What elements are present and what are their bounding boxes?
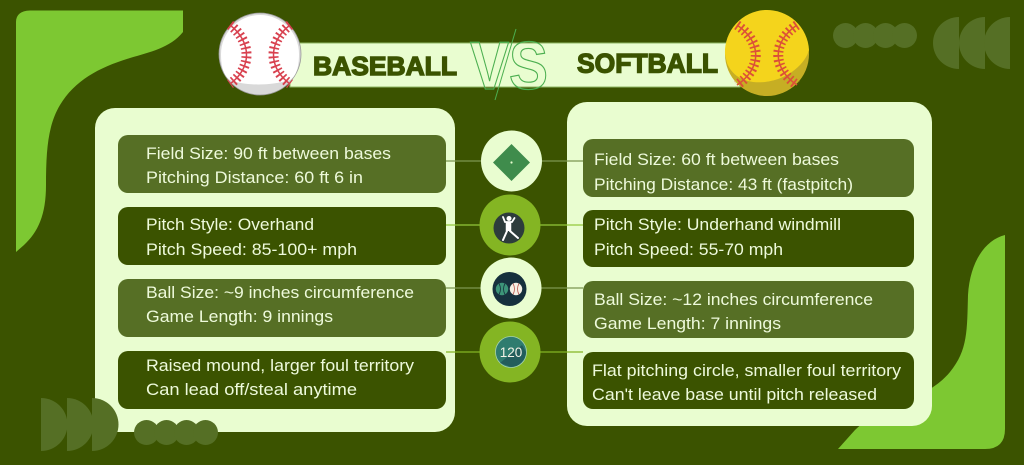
row: field size, baseball: Pitching Distance: 60 ft 6 in	[146, 168, 363, 187]
decorative dots: top right	[833, 23, 917, 48]
connector: pitch	[446, 224, 583, 226]
decorative half circles: top right	[933, 17, 1010, 69]
row: ball size, softball: Game Length: 7 innings	[594, 314, 781, 333]
row: ball size, softball: Ball Size: ~12 inches circumference	[594, 290, 873, 309]
row: pitch, baseball	[118, 207, 446, 265]
connector: rules	[446, 351, 583, 353]
icon: baseball	[219, 13, 301, 95]
row: pitch, baseball: Pitch Style: Overhand	[146, 215, 314, 234]
panel: baseball	[95, 108, 455, 432]
row: field size, softball: Pitching Distance: 43 ft (fastpitch)	[594, 175, 853, 194]
row: rules, baseball: Can lead off/steal anytime	[146, 380, 357, 399]
decorative dots: bottom left	[134, 420, 218, 445]
row: pitch, softball: Pitch Speed: 55-70 mph	[594, 240, 783, 259]
row: ball size, baseball: Ball Size: ~9 inches circumference	[146, 283, 414, 302]
row: ball size, baseball	[118, 279, 446, 337]
title banner	[290, 43, 740, 87]
decorative half circles: bottom left	[41, 398, 119, 451]
VS mark: VS	[470, 28, 548, 104]
icon: field diamond	[481, 130, 542, 192]
row: pitch, softball: Pitch Style: Underhand windmill	[594, 215, 841, 234]
row: pitch, baseball: Pitch Speed: 85-100+ mph	[146, 240, 357, 259]
decorative corner shape: bottom right	[838, 235, 1005, 449]
row: field size, baseball: Field Size: 90 ft between bases	[146, 144, 391, 163]
row: field size, softball	[583, 139, 914, 197]
row: pitch, softball	[583, 210, 914, 267]
connector: ball size	[446, 287, 583, 289]
row: rules, softball	[583, 352, 914, 409]
row: ball size, baseball: Game Length: 9 innings	[146, 307, 333, 326]
icon: speed 120: 120	[500, 345, 522, 360]
row: field size, softball: Field Size: 60 ft between bases	[594, 150, 839, 169]
panel: softball	[567, 102, 932, 426]
row: field size, baseball	[118, 135, 446, 193]
icon: two balls	[480, 258, 542, 318]
row: ball size, softball	[583, 281, 914, 338]
connector: field size	[446, 160, 583, 162]
row: rules, baseball: Raised mound, larger foul territory	[146, 356, 415, 375]
heading: baseball: BASEBALL	[313, 51, 457, 81]
heading: softball: SOFTBALL	[577, 48, 718, 78]
row: rules, baseball	[118, 351, 446, 409]
icon: softball	[725, 10, 809, 96]
icon: speed 120	[480, 322, 540, 382]
row: rules, softball: Flat pitching circle, smaller foul territory	[592, 361, 902, 380]
row: rules, softball: Can't leave base until pitch released	[592, 385, 877, 404]
decorative corner shape: top left	[16, 10, 183, 252]
icon: pitcher	[480, 194, 540, 256]
